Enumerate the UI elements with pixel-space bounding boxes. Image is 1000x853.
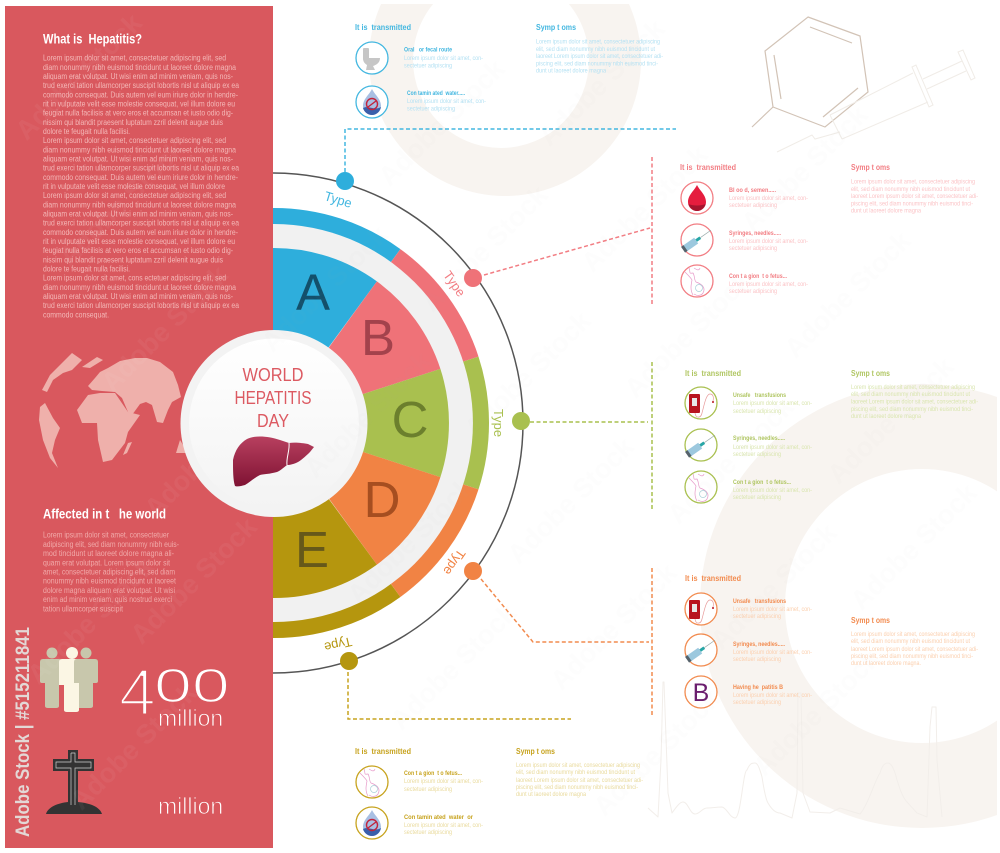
icon: grave cross — [46, 750, 102, 814]
section: type A transmission: Oral or fecal route — [404, 48, 453, 54]
chart: outer coloured band — [273, 208, 489, 638]
background: syringe outline — [777, 50, 975, 152]
chart letters: B — [361, 309, 395, 366]
chart: grey separator band — [273, 224, 473, 622]
section: type B transmission: Con t a gion t o fetus... — [729, 274, 787, 280]
section: type C symptoms: piscing elit, sed diam nonummy nibh euismod tinci- — [851, 407, 973, 413]
outer circle line — [273, 173, 523, 673]
section: type D transmission: It is transmitted — [685, 574, 741, 583]
heading: what is hepatitis: What is Hepatitis? — [43, 30, 142, 46]
section: type C transmission: Unsafe transfusions — [733, 393, 787, 399]
watermark: panel area: Adobe Stock — [125, 511, 263, 650]
section: type E transmission: sectetuer adipiscing — [404, 830, 452, 836]
text block: hepatitis description: Lorem ipsum dolor sit amet, consectetuer adipiscing elit, sed — [43, 191, 226, 200]
watermark: page area: Adobe Stock — [299, 345, 437, 484]
text block: affected description: nonummy nibh euismod tincidunt ut laoreet — [43, 577, 177, 586]
watermark: page area: Adobe Stock — [588, 683, 726, 822]
section: type C transmission: sectetuer adipiscing — [733, 495, 781, 501]
text block: hepatitis description: aliquam erat volutpat. Ut wisi enim ad minim veniam, quis nos- — [43, 154, 233, 164]
watermark: panel area: Adobe Stock — [53, 133, 191, 272]
vertical stock credit: Adobe Stock | #515211841 — [13, 627, 34, 837]
watermark: page area: Adobe Stock — [385, 597, 523, 736]
type labels: Type — [440, 268, 469, 299]
watermark: page area: Adobe Stock — [342, 471, 480, 610]
text block: hepatitis description: diam nonummy nibh euismod tincidunt ut laoreet dolore magna — [43, 283, 237, 292]
watermark: page area: Adobe Stock — [619, 265, 757, 404]
section: type D symptoms: dunt ut laoreet dolore magna. — [851, 661, 921, 667]
text block: hepatitis description: diam nonummy nibh euismod tincidunt ut laoreet dolore magna — [43, 145, 237, 154]
section: type E symptoms: piscing elit, sed diam nonummy nibh euismod tinci- — [516, 785, 638, 791]
type labels — [323, 188, 506, 655]
watermark: page area: Adobe Stock — [256, 219, 394, 358]
watermark: page area: Adobe Stock — [779, 225, 917, 364]
type labels: Type — [440, 547, 469, 578]
section: type E transmission: Lorem ipsum dolor sit amet, con- — [404, 823, 483, 829]
section: type A transmission: sectetuer adipiscing — [404, 64, 452, 70]
center badge: WORLD — [242, 364, 304, 385]
stat: deaths million: million — [158, 793, 223, 819]
text block: hepatitis description: trud exerci tation ullamcorper suscipit lobortis nisl ut aliquip ex ea — [43, 164, 240, 173]
section: type D transmission: Lorem ipsum dolor sit amet, con- — [733, 607, 812, 613]
watermark: page area: Adobe Stock — [459, 305, 597, 444]
watermark: panel area: Adobe Stock — [65, 677, 203, 816]
section: type C transmission: sectetuer adipiscing — [733, 409, 781, 415]
panel: left red column — [5, 6, 273, 848]
section: type E transmission: It is transmitted — [355, 747, 411, 756]
connector: type D — [481, 568, 652, 715]
section: type B transmission: Bl oo d, semen..... — [729, 188, 776, 194]
section: type D symptoms: Symp t oms — [851, 616, 890, 625]
text block: hepatitis description: nissim qui blandit praesent luptatum zzril delenit augue duis — [43, 118, 223, 127]
text block: hepatitis description — [43, 54, 240, 319]
type labels: Type — [323, 634, 353, 655]
watermark: panel area: Adobe Stock — [22, 551, 160, 690]
stat: 400 million: 4 — [119, 655, 156, 729]
section: type B transmission: sectetuer adipiscing — [729, 289, 777, 295]
section: type A transmission: Lorem ipsum dolor sit amet, con- — [404, 56, 483, 62]
section: type A symptoms: laoreet Lorem ipsum dolor sit amet, consectetuer adi- — [536, 54, 663, 60]
watermark: panel area: Adobe Stock — [10, 7, 148, 146]
text block: hepatitis description: Lorem ipsum dolor sit amet, consectetuer adipiscing elit, sed — [43, 136, 226, 145]
text block: hepatitis description: commodo consequat. — [43, 310, 109, 319]
section: type C symptoms: elit, sed diam nonummy nibh euismod tincidunt ut — [851, 392, 970, 398]
watermark: page area — [256, 13, 983, 822]
text block: affected description: amet, consectetuer adipiscing elit, sed diam — [43, 568, 175, 576]
section: type D transmission: B — [693, 679, 709, 707]
connector: type A — [345, 129, 676, 172]
chart letters: A — [296, 264, 330, 321]
chart: inner wedges — [273, 248, 449, 598]
connector: type C — [530, 362, 652, 510]
watermark: page area: Adobe Stock — [533, 13, 671, 152]
text block: hepatitis description: aliquam erat volutpat. Ut wisi enim ad minim veniam, quis nos- — [43, 292, 233, 301]
text block: hepatitis description: trud exerci tation ullamcorper suscipit lobortis nisl ut aliquip ex ea — [43, 301, 240, 310]
text block: hepatitis description: nissim qui blandit praesent luptatum zzril delenit augue duis — [43, 255, 223, 264]
text block: hepatitis description: dolore te feugait nulla facilisi. — [43, 127, 130, 136]
section: type E symptoms — [516, 747, 643, 798]
section: type A transmission: Con tamin ated water..... — [407, 91, 465, 97]
section: type B transmission: Lorem ipsum dolor sit amet, con- — [729, 239, 808, 245]
text block: affected description: tation ullamcorper suscipit — [43, 604, 124, 613]
text block: hepatitis description: feugiat nulla facilisis at vero eros et accumsan et iusto odio dig- — [43, 109, 233, 118]
watermark: page area: Adobe Stock — [416, 179, 554, 318]
section: type B transmission: sectetuer adipiscing — [729, 203, 777, 209]
watermark: page area: Adobe Stock — [373, 53, 511, 192]
section: type E symptoms: laoreet Lorem ipsum dolor sit amet, consectetuer adi- — [516, 778, 643, 784]
section: type D transmission: Lorem ipsum dolor sit amet, con- — [733, 650, 812, 656]
center badge — [180, 330, 368, 517]
section: type C transmission: It is transmitted — [685, 369, 741, 378]
chart letters: E — [295, 521, 329, 578]
section: type B transmission: Syringes, needles..... — [729, 231, 781, 237]
watermark: panel area — [10, 7, 277, 816]
text block: hepatitis description: diam nonummy nibh euismod tincidunt ut laoreet dolore magna — [43, 200, 237, 209]
section: type E transmission: Lorem ipsum dolor sit amet, con- — [404, 779, 483, 785]
text block: hepatitis description: feugiat nulla facilisis at vero eros et accumsan et iusto odio dig- — [43, 246, 233, 255]
text block: hepatitis description: rit in vulputate velit esse molestie consequat, vel illum dolore eu — [43, 100, 235, 108]
text block: hepatitis description: commodo consequat. Duis autem vel eum iriure dolor in hendre- — [43, 228, 238, 237]
section: type B symptoms: laoreet Lorem ipsum dolor sit amet, consectetuer adi- — [851, 194, 978, 200]
section: type C transmission — [685, 369, 812, 503]
chart letters: C — [392, 391, 428, 448]
section: type D symptoms — [851, 616, 978, 667]
section: type C transmission: Con t a gion t o fetus... — [733, 480, 791, 486]
stat: 400 million — [119, 655, 230, 731]
section: type D symptoms: elit, sed diam nonummy nibh euismod tincidunt ut — [851, 639, 970, 645]
center badge: DAY — [257, 410, 289, 431]
section: type A transmission: Lorem ipsum dolor sit amet, con- — [407, 99, 486, 105]
section: type A symptoms — [536, 23, 663, 75]
watermark: page area: Adobe Stock — [736, 99, 874, 238]
section: type D symptoms: piscing elit, sed diam nonummy nibh euismod tinci- — [851, 654, 973, 660]
section: type E transmission: Con tamin ated water or — [404, 815, 474, 821]
text block: affected description: mod tincidunt ut laoreet dolore magna ali- — [43, 549, 174, 558]
section: type A symptoms: piscing elit, sed diam nonummy nibh euismod tinci- — [536, 62, 658, 68]
text block: affected description: Lorem ipsum dolor sit amet, consectetuer — [43, 531, 169, 540]
type labels: Type — [491, 409, 506, 437]
section: type D transmission: Unsafe transfusions — [733, 599, 787, 605]
watermark: page area: Adobe Stock — [502, 431, 640, 570]
section: type C symptoms: laoreet Lorem ipsum dolor sit amet, consectetuer adi- — [851, 400, 978, 406]
section: type B symptoms — [851, 163, 978, 215]
text block: hepatitis description: aliquam erat volutpat. Ut wisi enim ad minim veniam, quis nos- — [43, 72, 233, 81]
chart letters: D — [364, 471, 400, 528]
section: type E symptoms: elit, sed diam nonummy nibh euismod tincidunt ut — [516, 770, 635, 776]
section: type E transmission: sectetuer adipiscing — [404, 787, 452, 793]
section: type C symptoms: Symp t oms — [851, 369, 890, 378]
heading: affected in the world: Affected in t he world — [43, 506, 166, 522]
section: type E transmission — [355, 747, 483, 839]
text block: hepatitis description: rit in vulputate velit esse molestie consequat, vel illum dolore — [43, 182, 226, 191]
chart letters — [295, 264, 428, 578]
icon: world map — [39, 353, 188, 468]
section: type D transmission: Having he patitis B — [733, 685, 784, 691]
section: type A symptoms: elit, sed diam nonummy nibh euismod tincidunt ut — [536, 47, 655, 53]
section: type B transmission: Lorem ipsum dolor sit amet, con- — [729, 282, 808, 288]
text block: hepatitis description: trud exerci tation ullamcorper suscipit lobortis nisl ut aliquip ex ea — [43, 81, 240, 90]
text block: hepatitis description: rit in vulputate velit esse molestie consequat, vel illum dolore eu — [43, 237, 235, 246]
section: type B symptoms: Lorem ipsum dolor sit amet, consectetuer adipiscing — [851, 180, 975, 186]
section: type B transmission: Lorem ipsum dolor sit amet, con- — [729, 196, 808, 202]
text block: hepatitis description: aliquam erat volutpat. Ut wisi enim ad minim veniam, quis nos- — [43, 210, 233, 218]
text block: hepatitis description: Lorem ipsum dolor sit amet, consectetuer adipiscing elit, sed — [43, 54, 226, 63]
watermark: page area: Adobe Stock — [545, 557, 683, 696]
text block: hepatitis description: trud exerci tation ullamcorper suscipit lobortis nisl ut aliquip ex ea — [43, 219, 240, 228]
section: type A symptoms: dunt ut laoreet dolore magna — [536, 69, 607, 75]
watermark: page area: Adobe Stock — [822, 351, 960, 490]
type labels: Type — [323, 188, 354, 211]
icon: people group — [40, 647, 98, 712]
text block: affected description: enim ad minim veniam, quis nostrud exerci — [43, 595, 172, 604]
watermark: page area: Adobe Stock — [705, 517, 843, 656]
text block: hepatitis description: dolore te feugait nulla facilisi. — [43, 264, 130, 274]
section: type E symptoms: dunt ut laoreet dolore magna — [516, 792, 587, 798]
text block: hepatitis description: commodo consequat. Duis autem vel eum iriure dolor in hendre- — [43, 90, 238, 99]
text block: hepatitis description: commodo consequat. Duis autem vel eum iriure dolor in hendre- — [43, 173, 238, 182]
text block: hepatitis description: Lorem ipsum dolor sit amet, cons ectetuer adipiscing elit, sed — [43, 274, 226, 283]
section: type C transmission: sectetuer adipiscing — [733, 452, 781, 458]
section: type A transmission — [355, 23, 486, 118]
section: type E transmission: Con t a gion t o fetus... — [404, 771, 462, 777]
section: type B symptoms: elit, sed diam nonummy nibh euismod tincidunt ut — [851, 187, 970, 193]
section: type B transmission: It is transmitted — [680, 163, 736, 172]
section: type C symptoms: Lorem ipsum dolor sit amet, consectetuer adipiscing — [851, 385, 975, 391]
section: type B symptoms: dunt ut laoreet dolore magna — [851, 209, 922, 215]
section: type C transmission: Lorem ipsum dolor sit amet, con- — [733, 445, 812, 451]
section: type D symptoms: Lorem ipsum dolor sit amet, consectetuer adipiscing — [851, 632, 975, 638]
section: type D transmission: Syringes, needles..... — [733, 642, 785, 648]
center badge: HEPATITIS — [234, 387, 312, 408]
stat: 400 million: million — [158, 705, 223, 731]
section: type D transmission: Lorem ipsum dolor sit amet, con- — [733, 693, 812, 699]
section: type E symptoms: Symp t oms — [516, 747, 555, 756]
section: type D transmission: sectetuer adipiscing — [733, 700, 781, 706]
text block: affected description: dolore magna aliquam erat volutpat. Ut wisi — [43, 586, 175, 595]
watermark: page area: Adobe Stock — [662, 391, 800, 530]
section: type B symptoms: Symp t oms — [851, 163, 890, 172]
section: type A symptoms: Symp t oms — [536, 23, 576, 32]
section: type D transmission: sectetuer adipiscing — [733, 657, 781, 663]
text block: affected description: adipiscing elit, sed diam nonummy nibh euis- — [43, 540, 179, 549]
watermark: panel area: Adobe Stock — [96, 259, 234, 398]
text block: affected description: quam erat volutpat. Lorem ipsum dolor sit — [43, 558, 171, 567]
section: type C transmission: Lorem ipsum dolor sit amet, con- — [733, 488, 812, 494]
section: type D symptoms: laoreet Lorem ipsum dolor sit amet, consectetuer adi- — [851, 647, 978, 653]
background: molecule outline — [752, 17, 868, 127]
connector: type E — [348, 672, 571, 719]
watermark: page area: Adobe Stock — [576, 139, 714, 278]
section: type D transmission: sectetuer adipiscing — [733, 614, 781, 620]
text block: hepatitis description: diam nonummy nibh euismod tincidunt ut laoreet dolore magna — [43, 63, 237, 72]
type marker dots — [336, 172, 530, 670]
section: type A transmission: It is transmitted — [355, 23, 411, 32]
stat: 400 million: 00 — [154, 660, 230, 713]
watermark: page area: Adobe Stock — [845, 477, 983, 616]
background: right ring — [700, 384, 1000, 828]
connector: type B — [484, 157, 652, 305]
section: type A symptoms: Lorem ipsum dolor sit amet, consectetuer adipiscing — [536, 40, 660, 46]
background: ECG line — [648, 682, 942, 818]
section: type B transmission — [680, 163, 808, 297]
section: type D transmission — [685, 574, 812, 708]
section: type C symptoms — [851, 369, 978, 420]
background: top ring — [369, 0, 641, 196]
watermark: page area: Adobe Stock — [748, 643, 886, 782]
text block: affected description — [43, 531, 179, 613]
section: type B symptoms: piscing elit, sed diam nonummy nibh euismod tinci- — [851, 202, 973, 208]
section: type E symptoms: Lorem ipsum dolor sit amet, consectetuer adipiscing — [516, 763, 640, 769]
section: type A transmission: sectetuer adipiscing — [407, 106, 455, 112]
section: type C transmission: Lorem ipsum dolor sit amet, con- — [733, 401, 812, 407]
section: type C transmission: Syringes, needles..... — [733, 436, 785, 442]
section: type C symptoms: dunt ut laoreet dolore magna — [851, 414, 922, 420]
section: type B transmission: sectetuer adipiscing — [729, 246, 777, 252]
watermark: panel area: Adobe Stock — [139, 385, 277, 524]
